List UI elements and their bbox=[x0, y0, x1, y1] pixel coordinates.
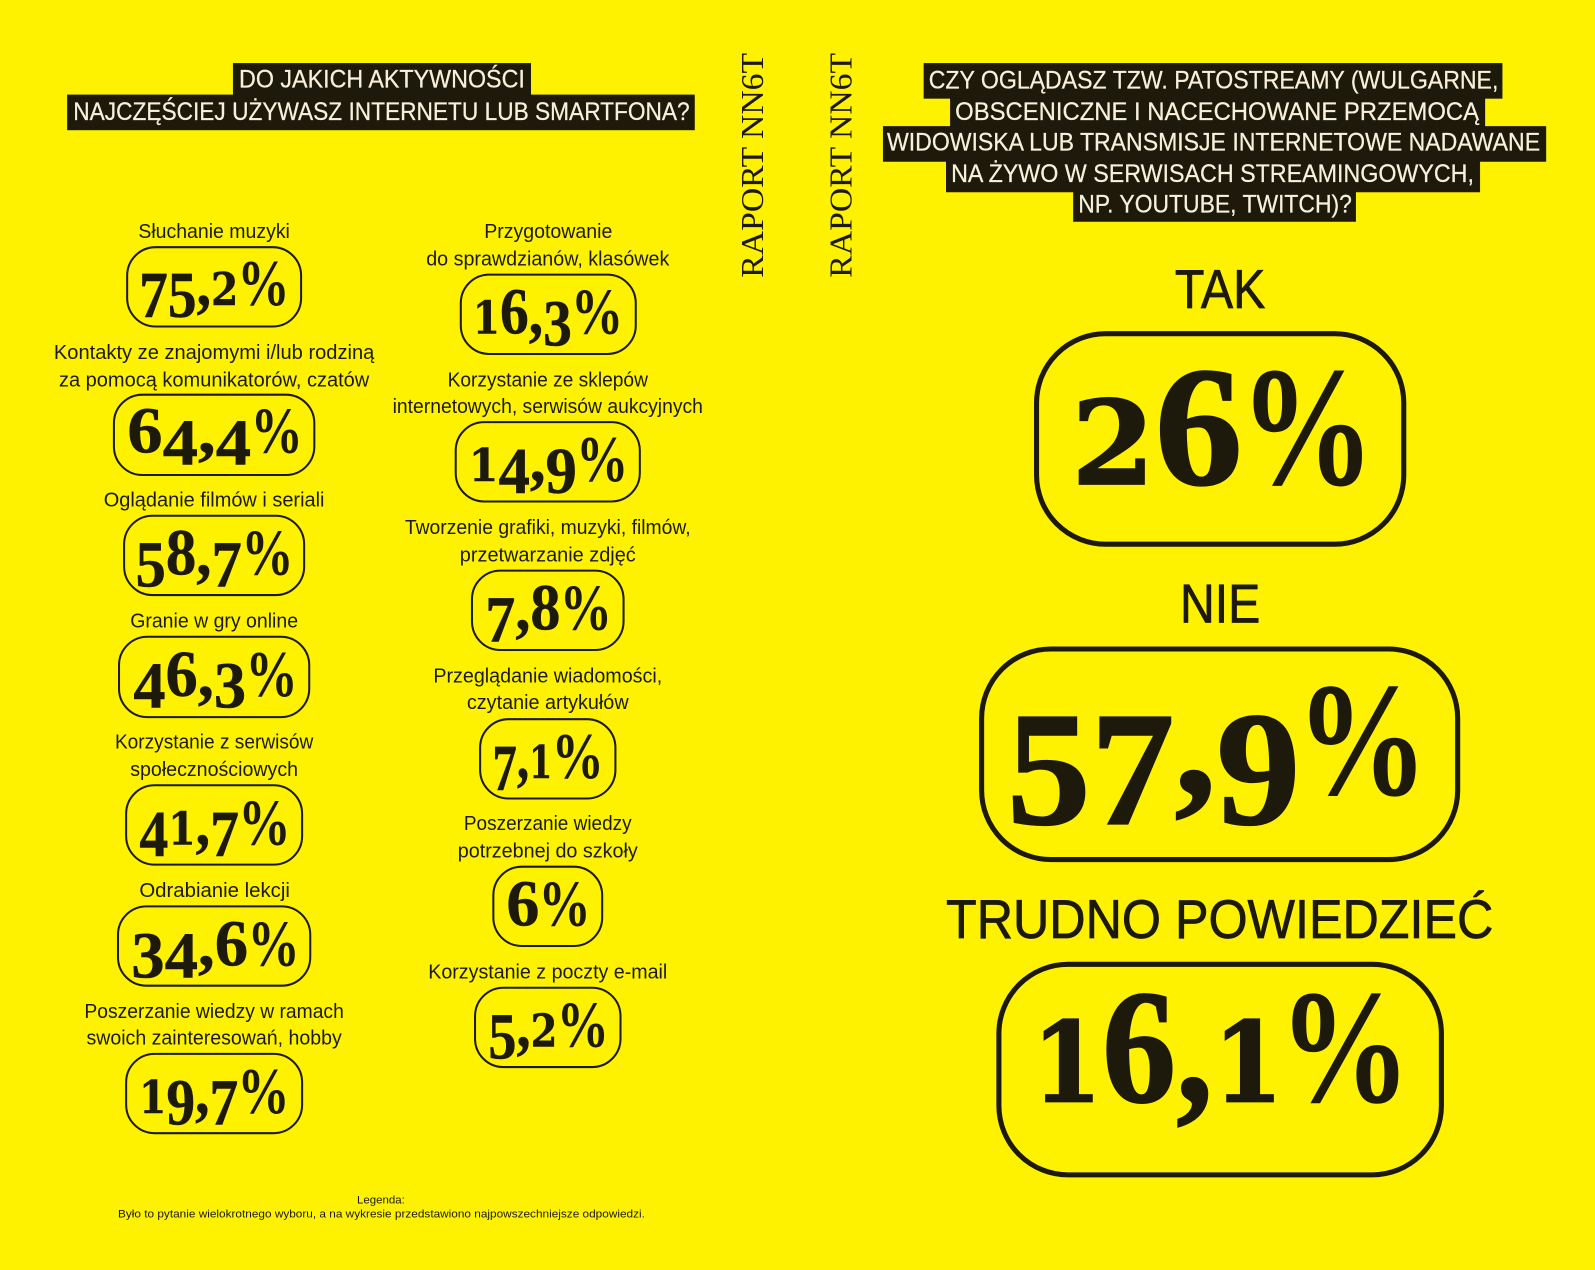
stat: Korzystanie z poczty e-mail bbox=[428, 962, 667, 1074]
heading: right question: OBSCENICZNE I NACECHOWANE PRZEMOCĄ bbox=[955, 98, 1480, 126]
stat: Korzystanie z poczty e-mail: % bbox=[557, 988, 609, 1061]
stat: Poszerzanie wiedzy szkoła: potrzebnej do szkoły bbox=[458, 841, 639, 863]
stat: Poszerzanie wiedzy hobby: 1 bbox=[139, 1070, 166, 1124]
answer: TAK: TAK bbox=[1175, 258, 1265, 320]
stat: Poszerzanie wiedzy szkoła: % bbox=[538, 867, 591, 940]
stat: Przeglądanie wiadomości: 1 bbox=[529, 737, 552, 790]
stat: Granie w gry online: 6, bbox=[166, 638, 214, 711]
stat: Odrabianie lekcji: Odrabianie lekcji bbox=[139, 880, 290, 902]
legend: Legenda: bbox=[357, 1194, 405, 1206]
stat: Przeglądanie wiadomości: % bbox=[552, 719, 604, 793]
stat: Korzystanie ze sklepów: % bbox=[576, 422, 628, 496]
stat: Poszerzanie wiedzy hobby: , bbox=[195, 1055, 209, 1128]
stat: Granie w gry online bbox=[119, 611, 309, 723]
stat: Słuchanie muzyki: , bbox=[197, 248, 211, 320]
answer: TAK bbox=[1037, 258, 1404, 544]
legend bbox=[118, 1194, 645, 1221]
stat: Kontakty: 6 bbox=[127, 394, 163, 467]
heading: right question bbox=[883, 63, 1546, 222]
stat: Słuchanie muzyki: Słuchanie muzyki bbox=[138, 221, 290, 243]
stat: Poszerzanie wiedzy hobby: 7 bbox=[209, 1067, 238, 1140]
answer: NIE: 57 bbox=[1007, 679, 1174, 859]
vertical label: raport right: RAPORT NN6T bbox=[823, 53, 858, 278]
heading: right question: WIDOWISKA LUB TRANSMISJE INTERNETOWE NADAWANE bbox=[887, 129, 1540, 157]
stat: Korzystanie z poczty e-mail: 5 bbox=[488, 1001, 517, 1074]
stat: Korzystanie z serwisów społecznościowych: 4 bbox=[139, 799, 168, 871]
stat: Przeglądanie wiadomości: czytanie artykułów bbox=[467, 692, 629, 714]
heading: right question: NP. YOUTUBE, TWITCH)? bbox=[1078, 191, 1352, 219]
stat: Korzystanie ze sklepów: 9 bbox=[546, 435, 577, 507]
legend: Było to pytanie wielokrotnego wyboru, a na wykresie przedstawiono najpowszechniejsze odpowiedzi. bbox=[118, 1209, 645, 1221]
stat: Słuchanie muzyki: 75 bbox=[139, 259, 197, 332]
answer: TAK: 26 bbox=[1071, 332, 1243, 522]
stat: Przeglądanie wiadomości: 7 bbox=[492, 731, 517, 805]
stat: Tworzenie grafiki: przetwarzanie zdjęć bbox=[460, 545, 636, 567]
stat: Kontakty: 4 bbox=[216, 406, 251, 479]
stat: Przygotowanie do sprawdzianów: 16, bbox=[473, 276, 543, 349]
stat: Granie w gry online: % bbox=[245, 637, 298, 710]
stat: Korzystanie z poczty e-mail: 2 bbox=[531, 1005, 557, 1057]
stat: Przygotowanie do sprawdzianów: Przygotowanie bbox=[484, 221, 612, 243]
stat: Poszerzanie wiedzy szkoła: 6 bbox=[506, 868, 539, 941]
answer: TRUDNO POWIEDZIEĆ: 16,1 bbox=[1032, 956, 1283, 1137]
answer: NIE: 9 bbox=[1216, 679, 1300, 859]
answer: TRUDNO POWIEDZIEĆ bbox=[946, 888, 1493, 1175]
stat: Korzystanie z serwisów społecznościowych: 1 bbox=[168, 802, 196, 855]
stat: Poszerzanie wiedzy hobby: swoich zainteresowań, hobby bbox=[86, 1028, 343, 1050]
stat: Oglądanie filmów i seriali: Oglądanie filmów i seriali bbox=[104, 490, 324, 512]
stat: Korzystanie ze sklepów bbox=[393, 370, 703, 507]
stat: Przygotowanie do sprawdzianów: do sprawdzianów, klasówek bbox=[426, 248, 670, 270]
stat: Korzystanie z serwisów społecznościowych bbox=[115, 732, 314, 871]
stat: Oglądanie filmów i seriali: 7 bbox=[212, 527, 242, 601]
stat: Odrabianie lekcji bbox=[118, 880, 310, 992]
stat: Przygotowanie do sprawdzianów: % bbox=[571, 275, 623, 348]
stat: Słuchanie muzyki: % bbox=[237, 246, 290, 320]
stat: Poszerzanie wiedzy hobby: Poszerzanie wiedzy w ramach bbox=[84, 1001, 344, 1023]
answer: NIE: % bbox=[1296, 650, 1428, 831]
stat: Korzystanie ze sklepów: , bbox=[530, 423, 546, 495]
stat: Przygotowanie do sprawdzianów bbox=[426, 221, 670, 360]
stat: Korzystanie ze sklepów: Korzystanie ze sklepów bbox=[448, 370, 648, 392]
stat: Tworzenie grafiki bbox=[405, 517, 691, 656]
stat: Odrabianie lekcji: 34 bbox=[131, 920, 198, 992]
stat: Korzystanie ze sklepów: 4 bbox=[498, 435, 530, 507]
answer: TRUDNO POWIEDZIEĆ: TRUDNO POWIEDZIEĆ bbox=[946, 888, 1493, 950]
stat: Kontakty: 4 bbox=[163, 406, 198, 479]
answer: NIE: , bbox=[1174, 650, 1216, 830]
answer: NIE bbox=[982, 573, 1458, 860]
heading: left question bbox=[67, 63, 695, 130]
stat: Kontakty: % bbox=[251, 394, 303, 467]
stat: Poszerzanie wiedzy hobby bbox=[84, 1001, 344, 1140]
stat: Korzystanie z serwisów społecznościowych: społecznościowych bbox=[130, 759, 298, 781]
answer: TAK: % bbox=[1240, 333, 1375, 522]
vertical label: raport left: RAPORT NN6T bbox=[735, 53, 770, 278]
stat: Korzystanie z serwisów społecznościowych: Korzystanie z serwisów bbox=[115, 732, 314, 754]
stat: Przeglądanie wiadomości: Przeglądanie wiadomości, bbox=[433, 666, 662, 688]
stat: Przeglądanie wiadomości: , bbox=[517, 719, 529, 793]
answer: TRUDNO POWIEDZIEĆ: % bbox=[1279, 958, 1411, 1138]
stat: Tworzenie grafiki: 7 bbox=[485, 583, 515, 656]
stat: Odrabianie lekcji: ,6 bbox=[198, 908, 248, 980]
stat: Granie w gry online: 3 bbox=[214, 650, 246, 723]
stat: Poszerzanie wiedzy hobby: 9 bbox=[166, 1067, 195, 1140]
stat: Tworzenie grafiki: % bbox=[560, 571, 612, 644]
stat: Granie w gry online: 4 bbox=[133, 650, 166, 723]
stat: Oglądanie filmów i seriali: % bbox=[241, 516, 294, 589]
stat: Odrabianie lekcji: % bbox=[248, 907, 300, 980]
stat: Tworzenie grafiki: ,8 bbox=[515, 571, 560, 644]
answer: NIE: NIE bbox=[1180, 573, 1260, 635]
stat: Oglądanie filmów i seriali: 8, bbox=[166, 515, 212, 589]
heading: left question: DO JAKICH AKTYWNOŚCI bbox=[239, 63, 525, 93]
stat: Korzystanie z serwisów społecznościowych: 7 bbox=[210, 799, 239, 871]
stat: Korzystanie ze sklepów: 1 bbox=[469, 440, 498, 492]
stat: Kontakty bbox=[54, 342, 375, 479]
stat: Oglądanie filmów i seriali bbox=[104, 490, 324, 601]
stat: Tworzenie grafiki: Tworzenie grafiki, muzyki, filmów, bbox=[405, 517, 691, 539]
stat: Oglądanie filmów i seriali: 5 bbox=[135, 527, 166, 601]
stat: Korzystanie z poczty e-mail: , bbox=[517, 989, 531, 1062]
stat: Korzystanie z serwisów społecznościowych: % bbox=[238, 785, 291, 859]
stat: Słuchanie muzyki bbox=[127, 221, 301, 332]
heading: left question: NAJCZĘŚCIEJ UŻYWASZ INTERNETU LUB SMARTFONA? bbox=[73, 96, 690, 126]
stat: Korzystanie z serwisów społecznościowych: , bbox=[196, 787, 210, 859]
stat: Korzystanie z poczty e-mail: Korzystanie z poczty e-mail bbox=[428, 962, 667, 984]
stat: Poszerzanie wiedzy szkoła: Poszerzanie wiedzy bbox=[464, 813, 632, 835]
stat: Kontakty: Kontakty ze znajomymi i/lub rodziną bbox=[54, 342, 375, 364]
stat: Słuchanie muzyki: 2 bbox=[211, 262, 238, 316]
heading: right question: NA ŻYWO W SERWISACH STREAMINGOWYCH, bbox=[951, 159, 1474, 188]
stat: Poszerzanie wiedzy szkoła bbox=[458, 813, 639, 946]
stat: Kontakty: za pomocą komunikatorów, czatów bbox=[59, 370, 370, 392]
stat: Przygotowanie do sprawdzianów: 3 bbox=[543, 288, 572, 360]
heading: right question: CZY OGLĄDASZ TZW. PATOSTREAMY (WULGARNE, bbox=[929, 66, 1498, 94]
stat: Granie w gry online: Granie w gry online bbox=[130, 611, 298, 633]
stat: Korzystanie ze sklepów: internetowych, serwisów aukcyjnych bbox=[393, 396, 703, 418]
stat: Kontakty: , bbox=[198, 394, 216, 467]
stat: Poszerzanie wiedzy hobby: % bbox=[237, 1054, 290, 1127]
stat: Przeglądanie wiadomości bbox=[433, 666, 662, 805]
